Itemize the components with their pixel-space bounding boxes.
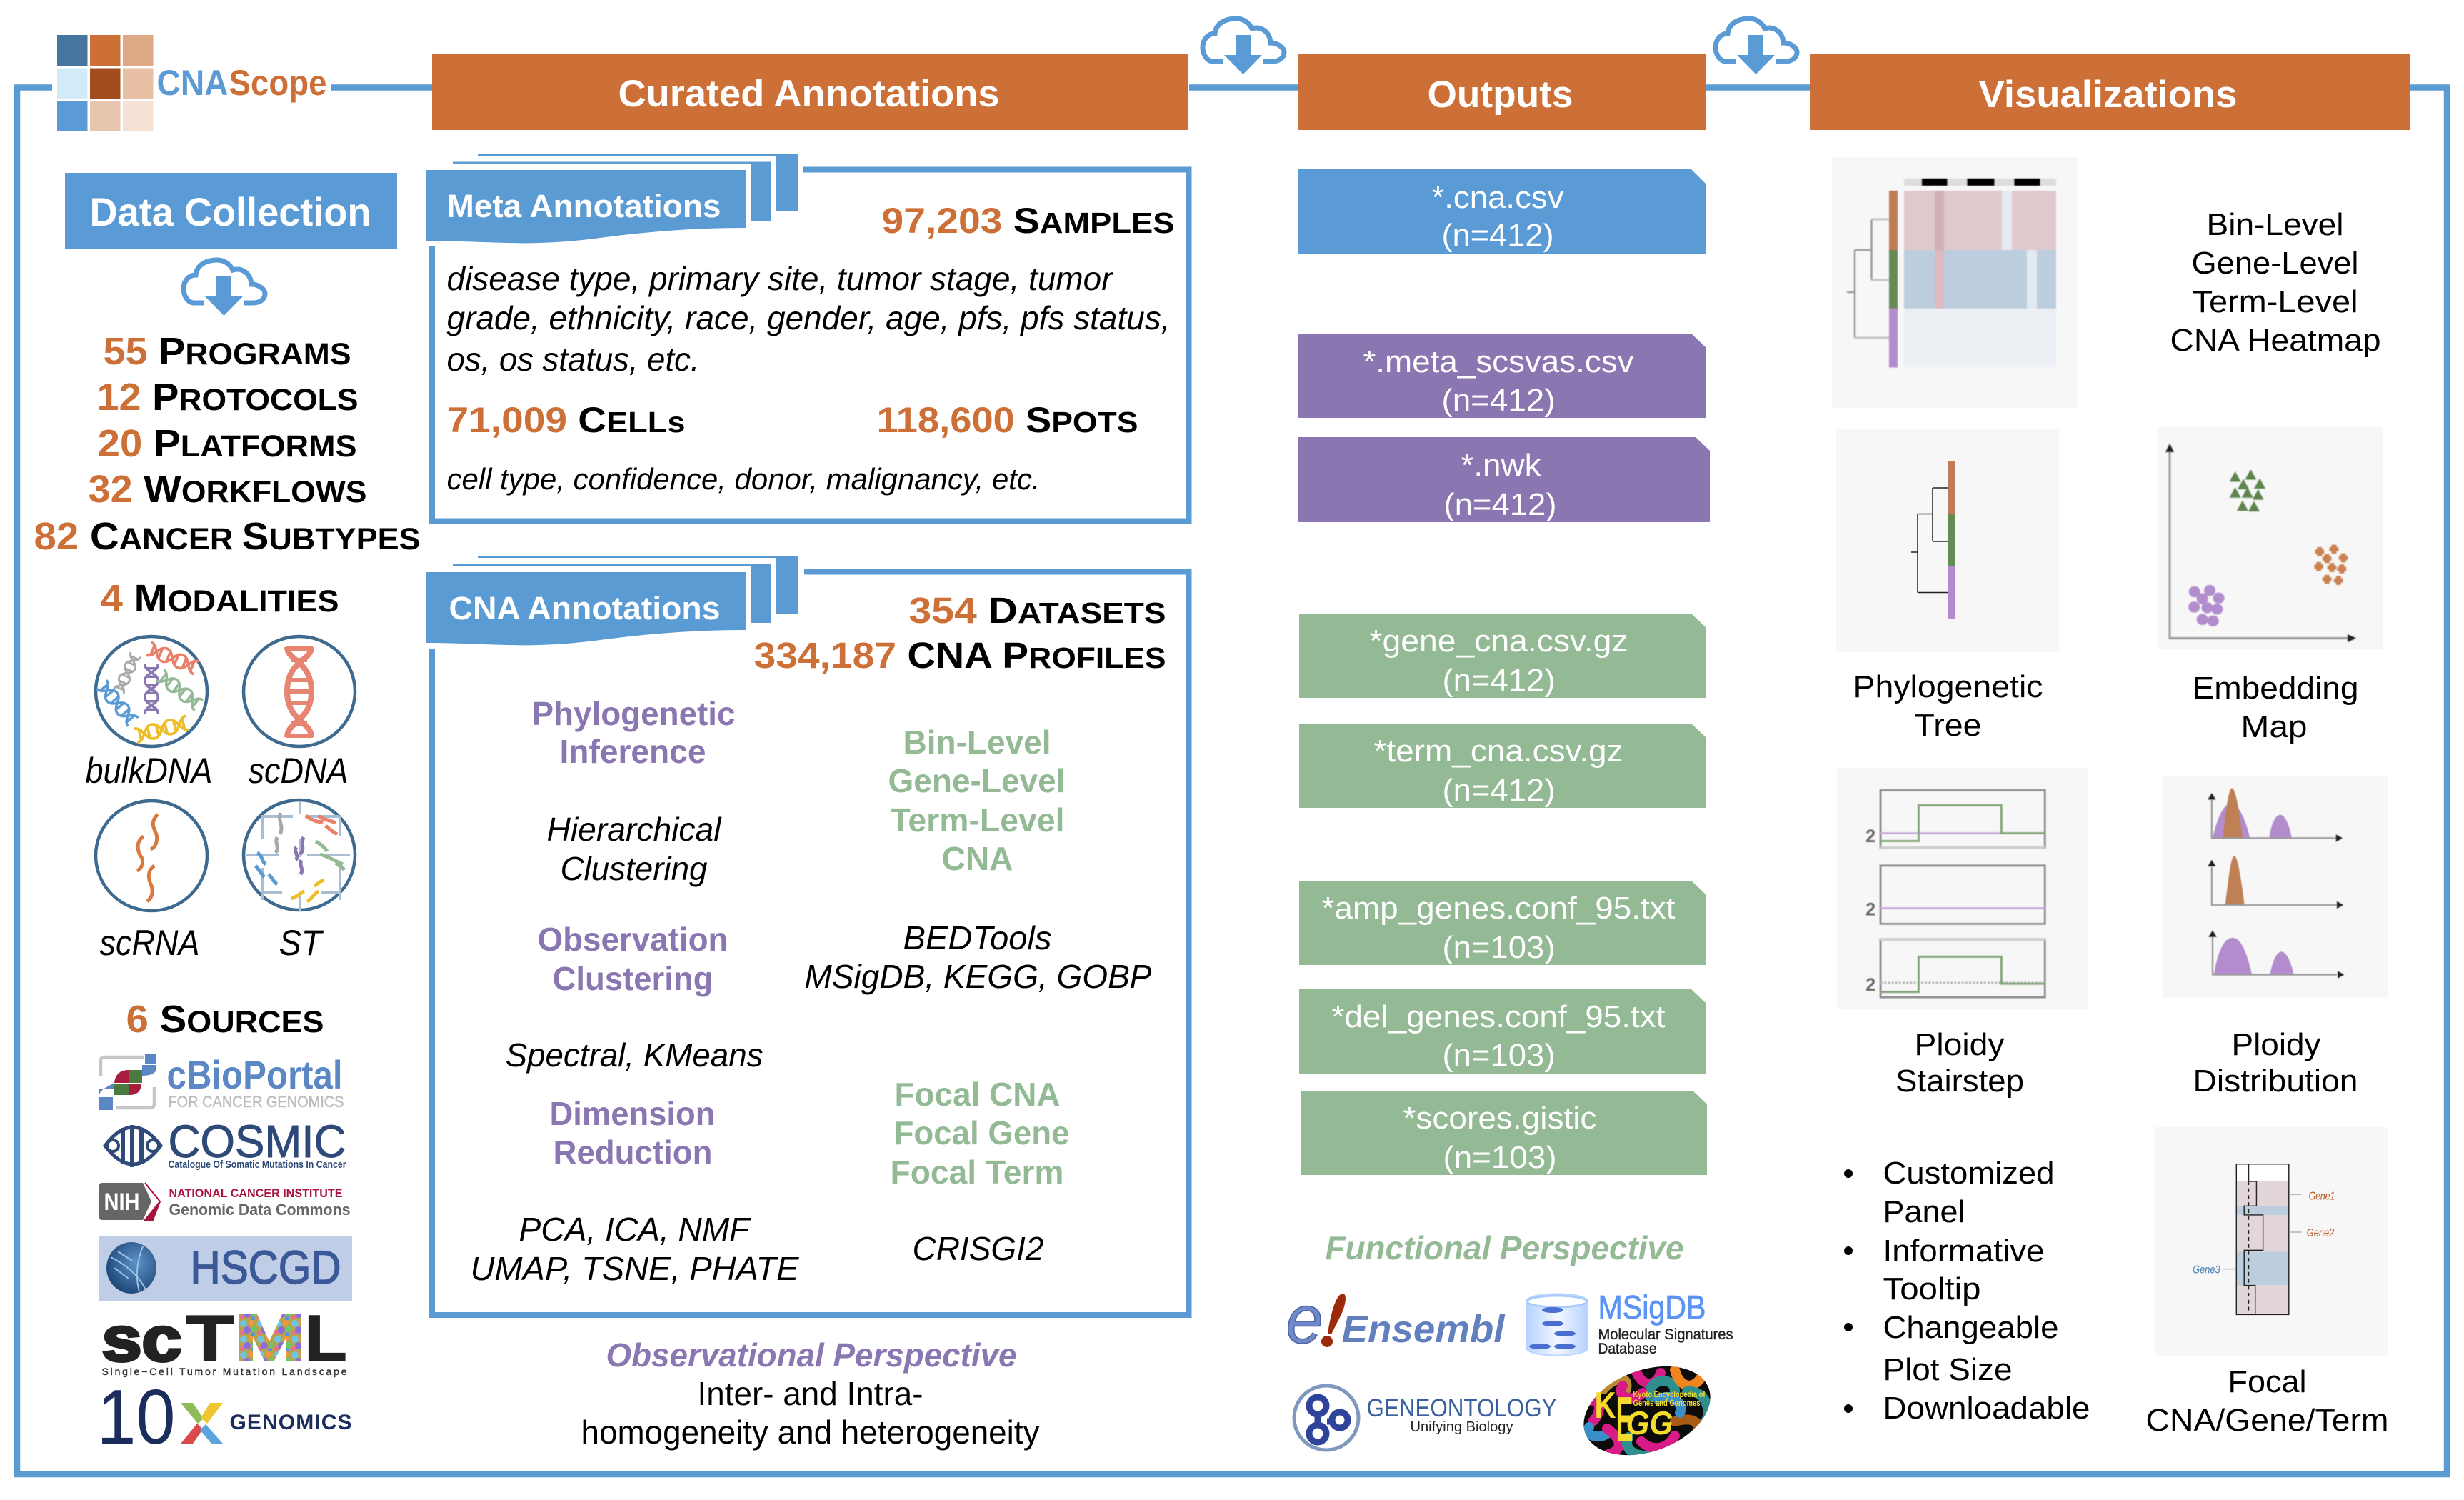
file: del_genes: *del_genes.conf_95.txt <box>1331 999 1666 1034</box>
feature bullet list: Informative <box>1883 1234 2044 1269</box>
observational column: Clustering <box>560 850 708 887</box>
banner: Curated Annotations <box>432 54 1188 130</box>
stat: cells: 71,009 CELLs <box>447 400 686 440</box>
chart: ploidy stairstep thumbnail: 2 <box>1865 826 1875 846</box>
logo: KEGG: GG <box>1626 1404 1673 1441</box>
stat: datasets: 354 DATASETS <box>908 590 1166 631</box>
logo: scTML <box>101 1303 347 1377</box>
feature bullet list: Changeable <box>1883 1310 2058 1345</box>
label: heatmap levels: Bin-Level <box>2207 207 2344 242</box>
chart: phylogenetic tree thumbnail <box>1836 429 2059 652</box>
file: cna.csv: (n=412) <box>1441 218 1554 253</box>
logo: 10x Genomics: 10 <box>97 1374 176 1461</box>
icon: bulkDNA <box>96 636 207 746</box>
label: heatmap levels: CNA Heatmap <box>2170 323 2381 358</box>
stats list: 32 WORKFLOWS <box>89 468 367 511</box>
logo: COSMIC: COSMIC <box>169 1116 346 1167</box>
logo: MSigDB: Database <box>1598 1341 1657 1357</box>
chart: CNA heatmap thumbnail <box>1832 157 2078 408</box>
stats list: 20 PLATFORMS <box>97 422 357 465</box>
caption: observational perspective: homogeneity and heterogeneity <box>581 1414 1040 1451</box>
file: nwk: *.nwk <box>1461 448 1542 483</box>
chart: focal CNA thumbnail: Gene2 <box>2307 1227 2335 1239</box>
logo: Gene Ontology: GENEONTOLOGY <box>1367 1394 1557 1422</box>
tab: CNA Annotations <box>426 572 746 645</box>
tab: Meta Annotations <box>426 170 746 243</box>
icon: cloud download visualizations <box>1716 19 1797 74</box>
observational column: Phylogenetic <box>531 695 736 732</box>
logo: COSMIC: Catalogue Of Somatic Mutations In Cancer <box>169 1159 346 1171</box>
logo: 10x Genomics <box>97 1374 351 1461</box>
panel: data collection column <box>34 173 420 1461</box>
file: nwk <box>1298 437 1710 522</box>
logo: MSigDB: Molecular Signatures <box>1598 1326 1733 1343</box>
logo: KEGG <box>1583 1366 1711 1456</box>
functional column: Focal CNA <box>894 1076 1060 1113</box>
label: ploidy stairstep: Ploidy <box>1914 1027 2004 1062</box>
feature bullet list: Plot Size <box>1883 1352 2013 1387</box>
logo: NIH GDC <box>99 1183 350 1220</box>
logo: KEGG: Kyoto Encyclopedia of <box>1633 1389 1706 1399</box>
logo: Ensembl: Ensembl <box>1341 1308 1506 1351</box>
functional column: CRISGI2 <box>913 1230 1044 1267</box>
stat: CNA profiles: 334,187 CNA P ROFILES <box>754 635 1166 676</box>
caption: observational perspective <box>581 1336 1040 1451</box>
label: phylogenetic tree: Phylogenetic <box>1853 669 2043 704</box>
logo: Gene Ontology: Unifying Biology <box>1410 1419 1513 1435</box>
functional column: MSigDB, KEGG, GOBP <box>804 958 1152 995</box>
functional column: Bin-Level <box>903 724 1051 761</box>
file: nwk: (n=412) <box>1444 487 1557 522</box>
heading: 6 sources: 6 SOURCES <box>126 998 324 1041</box>
file: term_cna: *term_cna.csv.gz <box>1374 734 1623 769</box>
file: amp_genes: *amp_genes.conf_95.txt <box>1321 891 1676 926</box>
stat: spots: 118,600 SPOTS <box>877 400 1138 440</box>
banner: Visualizations: Visualizations <box>1978 74 2237 116</box>
label: ploidy distribution <box>2193 1027 2358 1099</box>
file: amp_genes <box>1299 881 1706 965</box>
label: scDNA: scDNA <box>249 751 349 791</box>
icon: scRNA <box>96 801 207 911</box>
functional column: Focal Gene <box>894 1114 1070 1151</box>
logo: scTML: sc <box>101 1304 181 1374</box>
file: cna.csv <box>1298 169 1706 254</box>
logo: cBioPortal <box>99 1052 344 1111</box>
stats list <box>34 330 420 558</box>
logo: NIH GDC: NIH <box>104 1189 140 1216</box>
chart: ploidy stairstep thumbnail: 2 <box>1865 975 1875 995</box>
icon: scDNA <box>244 636 355 746</box>
observational column: Spectral, KMeans <box>506 1036 763 1074</box>
functional column <box>804 724 1152 1267</box>
banner: Visualizations <box>1810 54 2410 130</box>
observational column: Dimension <box>550 1095 716 1132</box>
chart: embedding map thumbnail <box>2157 427 2383 649</box>
file: term_cna <box>1299 724 1706 808</box>
chart: ploidy stairstep thumbnail: 2 <box>1865 899 1875 919</box>
functional column: Focal Term <box>890 1154 1064 1191</box>
tab: CNA Annotations: CNA Annotations <box>449 590 720 626</box>
file: meta_scsvas.csv: *.meta_scsvas.csv <box>1363 344 1634 379</box>
label: bulkDNA: bulkDNA <box>86 751 213 791</box>
label: ploidy stairstep <box>1895 1027 2024 1099</box>
functional column: Term-Level <box>890 801 1064 839</box>
label: focal CNA/Gene/Term <box>2145 1364 2388 1438</box>
chart: focal CNA thumbnail <box>2155 1127 2388 1356</box>
observational column: Reduction <box>553 1134 713 1171</box>
stats list: 55 PROGRAMS <box>103 330 351 373</box>
feature bullet list: Downloadable <box>1883 1391 2090 1426</box>
outputs file list <box>1298 169 1710 1175</box>
sample fields text: disease type, primary site, tumor stage, tumor <box>447 260 1113 297</box>
observational column: Clustering <box>553 960 713 997</box>
banner: Curated Annotations: Curated Annotations <box>618 73 1000 115</box>
observational column: Inference <box>560 733 706 770</box>
file: cna.csv: *.cna.csv <box>1431 180 1564 215</box>
logo: scTML: L <box>304 1303 347 1375</box>
logo: CNAScope: CNA <box>157 63 229 103</box>
sample fields text: os, os status, etc. <box>447 341 700 378</box>
label: embedding map <box>2193 671 2358 744</box>
file: term_cna: (n=412) <box>1443 773 1556 808</box>
observational column: PCA, ICA, NMF <box>519 1211 751 1248</box>
feature bullet list: Customized <box>1883 1156 2054 1191</box>
logo: HSCGD: HSCGD <box>190 1241 341 1294</box>
icon: cloud download <box>184 260 265 316</box>
logo: KEGG: Genes and Genomes <box>1633 1398 1701 1408</box>
file: meta_scsvas.csv <box>1298 334 1706 418</box>
logo: Ensembl <box>1286 1281 1506 1358</box>
file: gene_cna: *gene_cna.csv.gz <box>1370 624 1628 659</box>
chart: ploidy distribution thumbnail <box>2163 776 2388 998</box>
label: heatmap levels: Gene-Level <box>2191 246 2358 281</box>
icon: cloud download outputs <box>1203 19 1284 74</box>
stats list: 82 CANCER SUBTYPES <box>34 515 420 558</box>
label: focal CNA/Gene/Term: Focal <box>2228 1364 2307 1399</box>
file: scores.gistic <box>1301 1091 1707 1175</box>
heading: Data Collection: Data Collection <box>90 189 371 234</box>
panel: meta annotations <box>426 154 1188 521</box>
label: ploidy distribution: Ploidy <box>2231 1027 2321 1062</box>
observational column: UMAP, TSNE, PHATE <box>470 1250 800 1287</box>
label: embedding map: Map <box>2241 709 2307 744</box>
feature bullet list <box>1844 1156 2090 1426</box>
label: embedding map: Embedding <box>2193 671 2358 706</box>
functional column: CNA <box>941 840 1013 877</box>
label: scRNA: scRNA <box>100 923 200 963</box>
banner: Outputs: Outputs <box>1427 74 1573 116</box>
logo: CNAScope <box>57 35 327 131</box>
logo: NIH GDC: NATIONAL CANCER INSTITUTE <box>169 1186 343 1200</box>
feature bullet list: Tooltip <box>1883 1271 1981 1306</box>
logo: MSigDB: MSigDB <box>1598 1289 1706 1326</box>
logo: Ensembl: e <box>1286 1281 1323 1358</box>
heading: functional perspective: Functional Perspective <box>1326 1229 1684 1266</box>
stat: samples: 97,203 SAMPLES <box>881 201 1174 241</box>
label: ploidy distribution: Distribution <box>2193 1064 2358 1099</box>
file: del_genes <box>1299 989 1706 1074</box>
label: focal CNA/Gene/Term: CNA/Gene/Term <box>2145 1403 2388 1438</box>
file: scores.gistic: (n=103) <box>1443 1140 1557 1175</box>
observational column <box>470 695 800 1287</box>
caption: observational perspective: Inter- and Intra- <box>697 1375 923 1412</box>
logo: MSigDB <box>1526 1289 1733 1357</box>
caption: observational perspective: Observational Perspective <box>606 1336 1017 1374</box>
functional column: BEDTools <box>903 919 1051 956</box>
tab: Meta Annotations: Meta Annotations <box>447 188 721 224</box>
logo: 10x Genomics: GENOMICS <box>230 1411 351 1434</box>
logo: CNAScope: Scope <box>229 63 327 103</box>
chart: focal CNA thumbnail: Gene3 <box>2193 1264 2220 1276</box>
feature bullet list: Panel <box>1883 1194 1965 1229</box>
logo: COSMIC <box>105 1116 346 1171</box>
logo: NIH GDC: Genomic Data Commons <box>169 1201 350 1219</box>
observational column: Observation <box>537 921 728 958</box>
logo: scTML: T <box>186 1303 234 1375</box>
panel: CNA annotations <box>426 556 1188 1315</box>
sample fields text: grade, ethnicity, race, gender, age, pfs, pfs status, <box>447 299 1170 336</box>
logo: cBioPortal: FOR CANCER GENOMICS <box>169 1093 344 1111</box>
file: gene_cna <box>1299 614 1706 698</box>
logo: HSCGD <box>99 1236 352 1301</box>
chart: ploidy stairstep thumbnail <box>1837 768 2088 1009</box>
file: amp_genes: (n=103) <box>1443 930 1556 965</box>
logo: KEGG: E <box>1616 1384 1633 1454</box>
label: heatmap levels: Term-Level <box>2193 284 2358 319</box>
file: scores.gistic: *scores.gistic <box>1403 1101 1597 1136</box>
logo: Gene Ontology <box>1294 1386 1557 1450</box>
icon: ST <box>244 800 355 911</box>
file: meta_scsvas.csv: (n=412) <box>1441 383 1556 418</box>
stats list: 12 PROTOCOLS <box>97 376 359 419</box>
cell fields text: cell type, confidence, donor, malignancy, etc. <box>447 462 1040 496</box>
label: ploidy stairstep: Stairstep <box>1895 1064 2024 1099</box>
functional column: Gene-Level <box>888 762 1066 799</box>
label: ST: ST <box>279 923 324 963</box>
banner: Outputs <box>1298 54 1706 130</box>
heading: Data Collection <box>65 173 397 249</box>
file: gene_cna: (n=412) <box>1443 663 1556 698</box>
sample fields text <box>447 260 1170 378</box>
logo: cBioPortal: cBioPortal <box>167 1052 343 1097</box>
file: del_genes: (n=103) <box>1443 1038 1556 1073</box>
observational column: Hierarchical <box>547 811 722 848</box>
label: phylogenetic tree <box>1853 669 2043 743</box>
logo: scTML: Single−Cell Tumor Mutation Landscape <box>101 1366 347 1377</box>
label: phylogenetic tree: Tree <box>1914 708 1981 743</box>
logo: KEGG: K <box>1594 1385 1616 1426</box>
heading: 4 modalities: 4 MODALITIES <box>100 577 339 620</box>
chart: focal CNA thumbnail: Gene1 <box>2309 1191 2335 1203</box>
label: heatmap levels <box>2170 207 2381 358</box>
